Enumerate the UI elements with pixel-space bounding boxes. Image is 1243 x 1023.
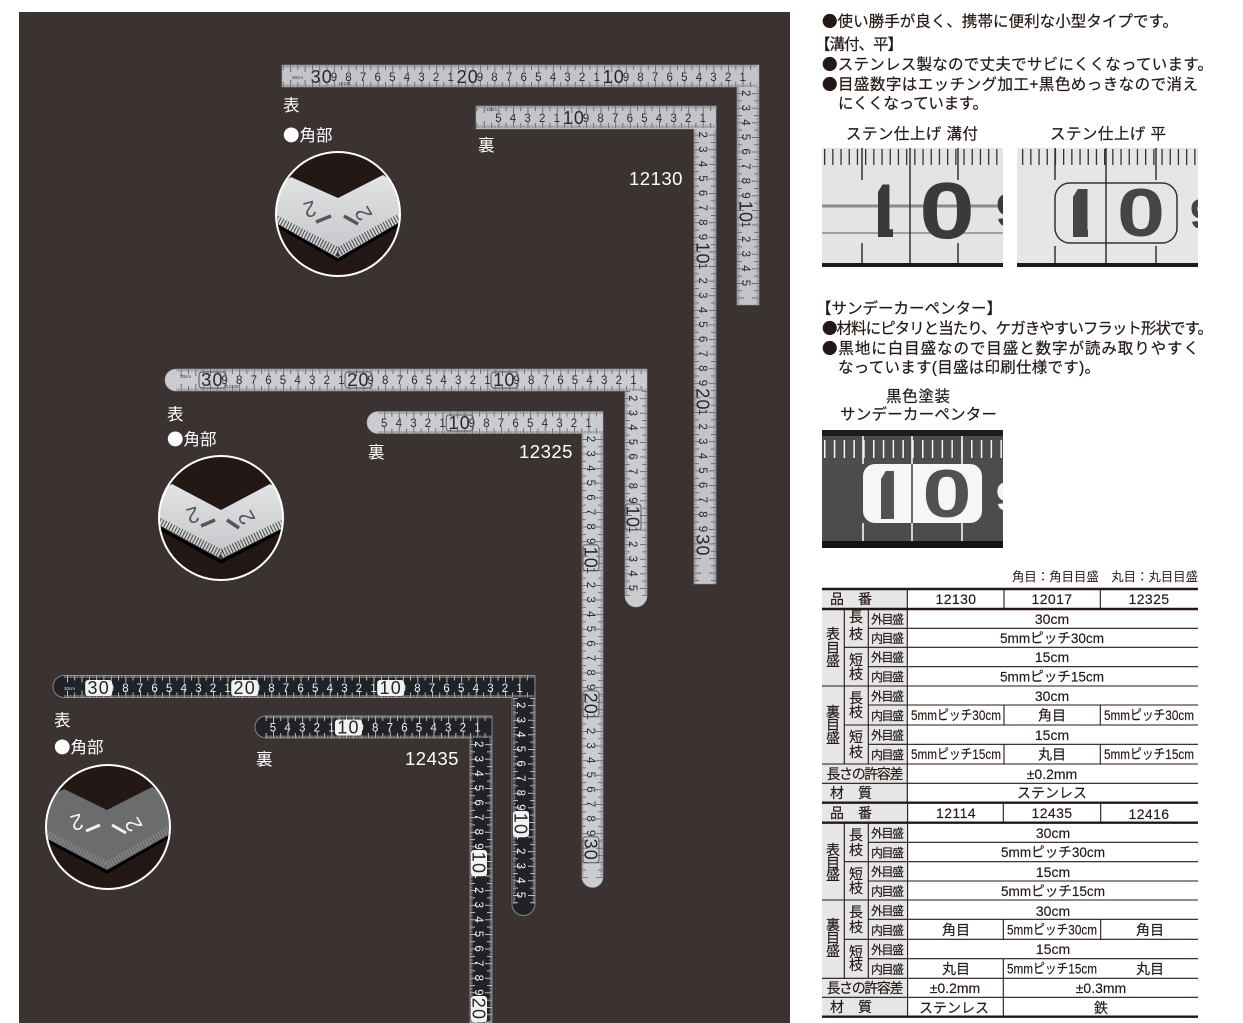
table: specs 12114 12435 12416: 丸目 [1136, 961, 1164, 977]
table: specs 12114 12435 12416: 盛 [826, 943, 840, 959]
label: 角部 (12130): ●角部 [283, 122, 332, 146]
table: specs 12130 12017 12325: 30cm [1035, 611, 1069, 627]
label: 裏 (12325): 裏 [368, 443, 384, 462]
circle: corner detail 12130 [276, 152, 400, 276]
label: 角部 (12325): ●角部 [167, 426, 216, 450]
table: specs 12114 12435 12416: 目 [826, 930, 840, 946]
table: specs 12114 12435 12416: 5mmピッチ30cm [1001, 844, 1105, 860]
table: specs 12114 12435 12416: 15cm [1036, 941, 1070, 957]
photo: flat finish 10 mark: 1 [1046, 173, 1108, 252]
table: specs 12130 12017 12325: 枝 [849, 744, 863, 760]
table: specs 12130 12017 12325: 短 [849, 729, 863, 745]
text block: intro features: ●使い勝手が良く、携帯に便利な小型タイプです。 [822, 10, 1178, 32]
ruler: 12325 front [165, 369, 648, 607]
table: specs 12130 12017 12325: 角目 [1038, 708, 1066, 724]
table: specs 12114 12435 12416: 12435 [1032, 805, 1072, 821]
ruler: 12130 front: 30 [311, 67, 333, 87]
table: specs 12114 12435 12416: 鉄 [1094, 1000, 1108, 1016]
table: specs 12130 12017 12325: ステンレス [1017, 785, 1087, 801]
table: specs 12130 12017 12325: 表 [826, 626, 840, 642]
table: specs 12114 12435 12416: 短 [849, 944, 863, 960]
table: specs 12130 12017 12325: 外目盛 [871, 688, 904, 704]
ruler: 12435 front: 123456789123456789123456789 [108, 683, 523, 695]
table: specs 12114 12435 12416: 裏 [826, 917, 840, 933]
label: model 12435: 12435 [405, 748, 459, 769]
text block: intro features: にくくなっています。 [838, 94, 988, 112]
table: specs 12130 12017 12325: 盛 [826, 730, 840, 746]
table: specs 12130 12017 12325: 5mmピッチ15cm [911, 746, 1001, 762]
caption: ステン仕上げ 平: ステン仕上げ 平 [1050, 125, 1166, 143]
table: specs 12130 12017 12325: 12325 [1129, 591, 1169, 607]
circle: corner detail 12130: 2 [301, 196, 319, 223]
table: specs 12114 12435 12416: 枝 [849, 842, 863, 858]
ruler: 12325 front: 2345678912345 [626, 395, 638, 591]
text block: Sunday carpenter features: ●材料にピタリと当たり、ケガきやすいフラット形状です。 [822, 316, 1213, 338]
label: model 12130: 12130 [629, 168, 683, 189]
text block: intro features: ●目盛数字はエッチング加工+黒色めっきなので消え [822, 72, 1198, 94]
table: specs 12130 12017 12325: 外目盛 [871, 728, 904, 742]
ruler: 12130 front: 20 [457, 67, 479, 87]
circle: corner detail 12325: 2 [184, 502, 202, 529]
text block: intro features [815, 10, 1213, 112]
table: specs 12130 12017 12325: 丸目 [1038, 746, 1066, 762]
table: specs 12130 12017 12325: 5mmピッチ15cm [1000, 668, 1104, 684]
ruler: 12325 back [367, 412, 603, 888]
ruler: 12130 front: 10 [736, 201, 756, 223]
table: specs 12114 12435 12416: 枝 [849, 957, 863, 973]
table: specs 12114 12435 12416: 外目盛 [871, 826, 904, 840]
table: specs 12114 12435 12416 [822, 804, 1198, 1017]
ruler: 12325 back: 20 [580, 693, 600, 715]
table: specs 12114 12435 12416: 内目盛 [871, 922, 904, 938]
ruler: 12325 front: 123456789123456789123456789 [221, 375, 637, 387]
label: model 12325: 12325 [519, 441, 573, 462]
table: specs 12130 12017 12325: 5mmピッチ30cm [1000, 630, 1104, 646]
table: specs 12114 12435 12416: 5mmピッチ15cm [1007, 960, 1097, 976]
panel: dark product background [19, 12, 790, 1023]
ruler: 12435 back: 12345678912345 [270, 722, 481, 734]
ruler: 12435 front: 30cm [64, 686, 75, 691]
ruler: 12325 front: 30 [201, 370, 224, 390]
circle: corner detail 12435 [46, 765, 170, 889]
table: specs 12130 12017 12325: 枝 [849, 666, 863, 682]
ruler: 12435 back: 20 [468, 998, 488, 1020]
ruler: 12130 front [282, 65, 759, 305]
ruler: 12435 back: 10 [468, 852, 488, 874]
table: specs 12130 12017 12325: 長 [849, 690, 863, 706]
table: specs 12130 12017 12325: 内目盛 [871, 747, 904, 762]
text block: Sunday carpenter features: ●黒地に白目盛なので目盛と数字が読み取りやすく [822, 336, 1199, 358]
table: specs 12114 12435 12416: 12114 [936, 805, 976, 821]
label: 表 (12435): 表 [54, 711, 70, 730]
table: specs 12130 12017 12325 [822, 589, 1198, 803]
ruler: 12325 back: 10 [448, 413, 471, 433]
table: specs 12130 12017 12325: 外目盛 [871, 612, 904, 626]
ruler: 12435 front: 20 [233, 678, 256, 698]
ruler: 12325 front: 10 [493, 370, 516, 390]
ruler: 12435 front: 2345678912345 [514, 702, 526, 898]
table: specs 12114 12435 12416: 長 [849, 827, 863, 843]
table: specs 12130 12017 12325: 品 番 [830, 591, 872, 607]
table: specs 12114 12435 12416: 12416 [1129, 806, 1169, 822]
ruler: 12325 back: 12345678912345 [381, 418, 592, 430]
photo: grooved finish 10 mark: 0 [919, 166, 975, 256]
table: specs 12114 12435 12416: 30cm [1036, 825, 1070, 841]
ruler: 12325 front: 20 [347, 370, 370, 390]
table: specs 12114 12435 12416: 内目盛 [871, 962, 904, 976]
photo: grooved finish 10 mark [822, 148, 1022, 267]
photo: flat finish 10 mark: 9 [1190, 190, 1213, 237]
table: specs 12114 12435 12416: 外目盛 [871, 942, 904, 957]
ruler: 12130 back: 20 [692, 388, 712, 411]
table: specs 12130 12017 12325: 内目盛 [871, 630, 904, 646]
table: specs 12114 12435 12416: 外目盛 [871, 864, 904, 879]
ruler: 12130 back: 23456789123456789123456789 [696, 131, 708, 532]
ruler: 12130 front: 30cm [292, 75, 303, 80]
circle: corner detail 12435: 2 [68, 809, 86, 836]
text block: intro features: 【溝付、平】 [815, 36, 903, 54]
legend note: 角目：角目目盛 丸目：丸目目盛 [1012, 569, 1198, 584]
table: specs 12130 12017 12325: 5mmピッチ15cm [1104, 746, 1194, 762]
table: specs 12114 12435 12416: 長さの許容差 [826, 980, 904, 996]
table: specs 12114 12435 12416: 表 [826, 842, 840, 858]
table: specs 12114 12435 12416: ±0.3mm [1076, 980, 1126, 996]
table: specs 12114 12435 12416: 長 [849, 904, 863, 920]
table: specs 12114 12435 12416: 角目 [942, 922, 970, 938]
table: specs 12130 12017 12325: 外目盛 [871, 650, 904, 664]
photo: flat finish 10 mark: 0 [1117, 176, 1165, 251]
caption: ステン仕上げ 溝付: ステン仕上げ 溝付 [846, 125, 978, 143]
table: specs 12130 12017 12325: 5mmピッチ30cm [911, 707, 1001, 723]
text block: Sunday carpenter features [816, 298, 1213, 376]
table: specs 12130 12017 12325: 30cm [1035, 688, 1069, 704]
ruler: 12130 back: 10 [692, 242, 712, 265]
table: specs 12130 12017 12325: 長 [849, 609, 863, 625]
table: specs 12130 12017 12325: 12017 [1032, 591, 1072, 607]
table: specs 12114 12435 12416: 品 番 [830, 805, 872, 821]
table: specs 12114 12435 12416: 材 質 [830, 999, 872, 1015]
table: specs 12130 12017 12325: 盛 [826, 653, 840, 669]
circle: corner detail 12130: 2 [350, 202, 377, 225]
caption: 黒色塗装: 黒色塗装 [886, 388, 950, 406]
table: specs 12114 12435 12416: 短 [849, 866, 863, 882]
table: specs 12114 12435 12416: 15cm [1036, 864, 1070, 880]
ruler: 12435 back: 10 [337, 718, 360, 738]
table: specs 12130 12017 12325: 12130 [936, 591, 976, 607]
ruler: 12130 back: 15cm [486, 107, 497, 112]
ruler: 12325 back: 23456789123456789123456789 [584, 436, 596, 836]
table: specs 12130 12017 12325: 短 [849, 652, 863, 668]
ruler: 12130 back: 12345678912345 [495, 113, 706, 125]
label: 裏 (12435): 裏 [256, 750, 272, 769]
circle: corner detail 12325: 2 [233, 506, 260, 529]
ruler: 12325 front: 12325 [226, 384, 239, 389]
table: specs 12130 12017 12325: 材 質 [830, 785, 872, 801]
table: specs 12130 12017 12325: 内目盛 [871, 708, 904, 723]
label: 表 (12130): 表 [283, 96, 300, 115]
table: specs 12130 12017 12325: ±0.2mm [1027, 766, 1077, 782]
text block: Sunday carpenter features: なっています(目盛は印刷仕様です)。 [838, 358, 1100, 376]
ruler: 12435 back [255, 716, 492, 1023]
photo: black coated 10 mark [822, 430, 1018, 548]
label: 表 (12325): 表 [167, 405, 184, 424]
table: specs 12130 12017 12325: 目 [826, 717, 840, 733]
ruler: 12325 back: 30 [580, 839, 600, 861]
photo: grooved finish 10 mark: 1 [850, 168, 909, 253]
label: 角部 (12435): ●角部 [54, 734, 104, 758]
table: specs 12130 12017 12325: 15cm [1035, 649, 1069, 665]
table: specs 12130 12017 12325: 15cm [1035, 727, 1069, 743]
table: specs 12114 12435 12416: 目 [826, 855, 840, 871]
table: specs 12114 12435 12416: 盛 [826, 867, 840, 883]
table: specs 12130 12017 12325: 5mmピッチ30cm [1104, 707, 1194, 723]
ruler: 12325 back: 10 [580, 547, 600, 569]
circle: corner detail 12325 [159, 456, 283, 580]
photo: black coated 10 mark: 9 [996, 475, 1018, 519]
table: specs 12130 12017 12325: 長さの許容差 [826, 766, 904, 782]
table: specs 12114 12435 12416: 内目盛 [871, 845, 904, 860]
table: specs 12130 12017 12325: 枝 [849, 626, 863, 642]
ruler: 12130 back [476, 106, 717, 584]
ruler: 12325 front: 30cm [180, 374, 191, 379]
table: specs 12114 12435 12416: 枝 [849, 880, 863, 896]
photo: black coated 10 mark: 0 [922, 456, 972, 532]
ruler: 12130 front: 2345678912345 [739, 90, 751, 286]
ruler: 12130 front: 12130 [338, 81, 351, 86]
table: specs 12130 12017 12325: 裏 [826, 704, 840, 720]
ruler: 12435 front: 10 [510, 813, 530, 835]
label: 裏 (12130): 裏 [478, 136, 494, 155]
photo: grooved finish 10 mark: 9 [996, 184, 1022, 236]
photo: flat finish 10 mark [1017, 148, 1213, 267]
ruler: 12435 back: 234567891234567891 [472, 741, 484, 1023]
table: specs 12114 12435 12416: 枝 [849, 919, 863, 935]
text block: intro features: ●ステンレス製なので丈夫でサビにくくなっています。 [822, 52, 1213, 74]
ruler: 12130 back: 10 [563, 108, 585, 128]
ruler: 12130 front: 10 [603, 67, 625, 87]
table: specs 12114 12435 12416: ±0.2mm [930, 980, 980, 996]
table: specs 12130 12017 12325: 目 [826, 640, 840, 656]
ruler: 12435 front [53, 676, 535, 916]
photo: black coated 10 mark: 1 [855, 455, 913, 534]
table: specs 12114 12435 12416: 角目 [1136, 922, 1164, 938]
table: specs 12114 12435 12416: ステンレス [919, 1000, 989, 1016]
circle: corner detail 12435: 2 [120, 813, 147, 836]
table: specs 12130 12017 12325: 枝 [849, 704, 863, 720]
ruler: 12435 front: 10 [379, 678, 402, 698]
ruler: 12130 front: 123456789123456789123456789 [331, 72, 746, 84]
ruler: 12130 back: 30 [692, 534, 712, 557]
table: specs 12114 12435 12416: 丸目 [942, 961, 970, 977]
table: specs 12114 12435 12416: 外目盛 [871, 903, 904, 918]
caption: サンデーカーペンター: サンデーカーペンター [840, 404, 997, 424]
table: specs 12130 12017 12325: 内目盛 [871, 669, 904, 684]
ruler: 12325 front: 10 [622, 506, 642, 528]
table: specs 12114 12435 12416: 5mmピッチ30cm [1007, 922, 1097, 938]
table: specs 12114 12435 12416: 内目盛 [871, 884, 904, 898]
ruler: 12435 front: 30 [87, 678, 110, 698]
table: specs 12114 12435 12416: 5mmピッチ15cm [1001, 883, 1105, 899]
text block: Sunday carpenter features: 【サンデーカーペンター】 [816, 298, 1002, 318]
table: specs 12114 12435 12416: 30cm [1036, 903, 1070, 919]
